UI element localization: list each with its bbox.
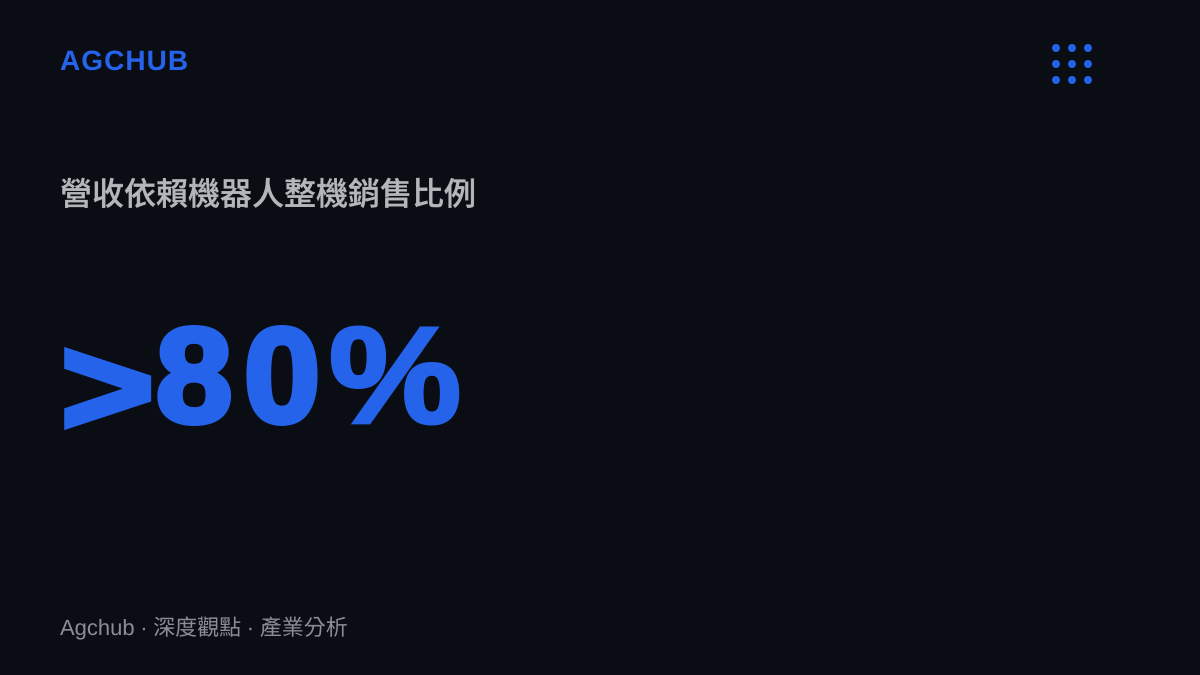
heading: 營收依賴機器人整機銷售比例 (60, 176, 476, 212)
logo: AGCHUB: AGCHUB (60, 45, 189, 76)
big number: 0 (244, 300, 321, 450)
big number: % (329, 298, 461, 452)
icon: dot grid (1052, 44, 1092, 84)
big number: > (60, 309, 154, 464)
footer text: Agchub · 深度觀點 · 產業分析 (60, 615, 348, 640)
big number: 8 (156, 300, 233, 450)
big number (60, 298, 461, 464)
